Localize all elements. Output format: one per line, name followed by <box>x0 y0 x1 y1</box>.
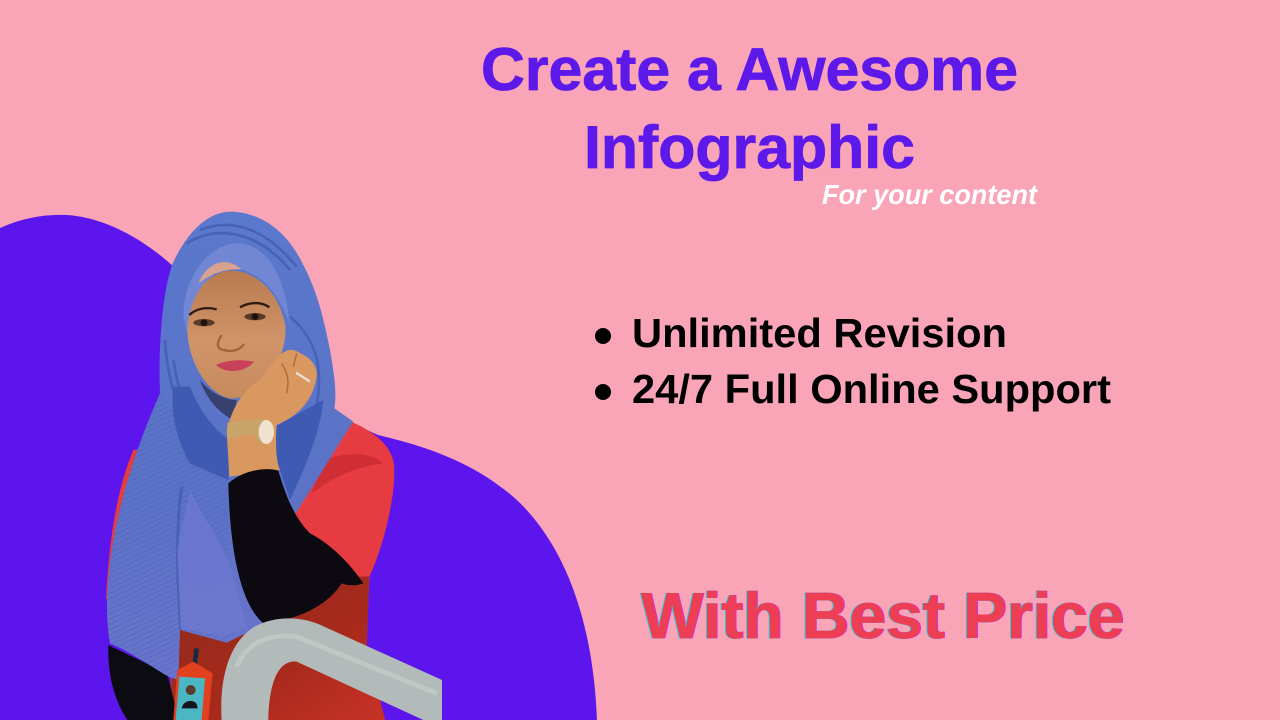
hijab lower light section <box>177 490 247 637</box>
nose shadow <box>218 335 244 351</box>
price tagline: With Best Price <box>641 579 1124 652</box>
dark folds below the chin <box>172 387 230 480</box>
bullet list <box>595 310 1111 412</box>
eyebrows <box>189 303 269 315</box>
item: online support: 24/7 Full Online Support <box>632 366 1111 412</box>
hijab inner lighter band <box>183 243 289 333</box>
right eye <box>244 313 266 320</box>
bullet dot 2 <box>595 384 611 400</box>
under-scarf <box>198 262 242 283</box>
watch face <box>259 420 274 444</box>
hand and wrist <box>227 350 317 477</box>
shirt shoulder shading <box>312 454 383 493</box>
item: unlimited revision: Unlimited Revision <box>632 310 1007 356</box>
hijab <box>107 212 353 680</box>
title line 2: Infographic <box>584 114 915 181</box>
eyes <box>193 319 215 326</box>
title <box>481 36 1018 181</box>
neck shadow <box>200 380 237 420</box>
title line 1: Create a Awesome <box>481 36 1018 103</box>
pleat texture on drape <box>107 393 230 680</box>
ID lanyard <box>194 648 197 670</box>
subtitle: For your content <box>822 179 1039 210</box>
gold watch strap <box>227 418 268 445</box>
lips <box>216 360 254 371</box>
ID photo card <box>176 677 205 720</box>
portrait of woman in blue hijab <box>106 212 442 720</box>
railing highlight <box>237 636 437 693</box>
darker lower shirt <box>170 577 385 720</box>
bullet dot 1 <box>595 328 611 344</box>
finger lines <box>282 353 297 393</box>
metal railing <box>221 618 442 720</box>
dark folds right of wrist <box>274 400 323 500</box>
red shirt <box>106 423 394 720</box>
purple blob background <box>0 215 597 720</box>
hijab shaded folds <box>165 225 319 630</box>
face <box>187 271 286 398</box>
black forearm <box>228 469 363 623</box>
left black sleeve <box>108 645 179 720</box>
ring <box>296 373 310 382</box>
ID badge holder <box>173 662 213 720</box>
